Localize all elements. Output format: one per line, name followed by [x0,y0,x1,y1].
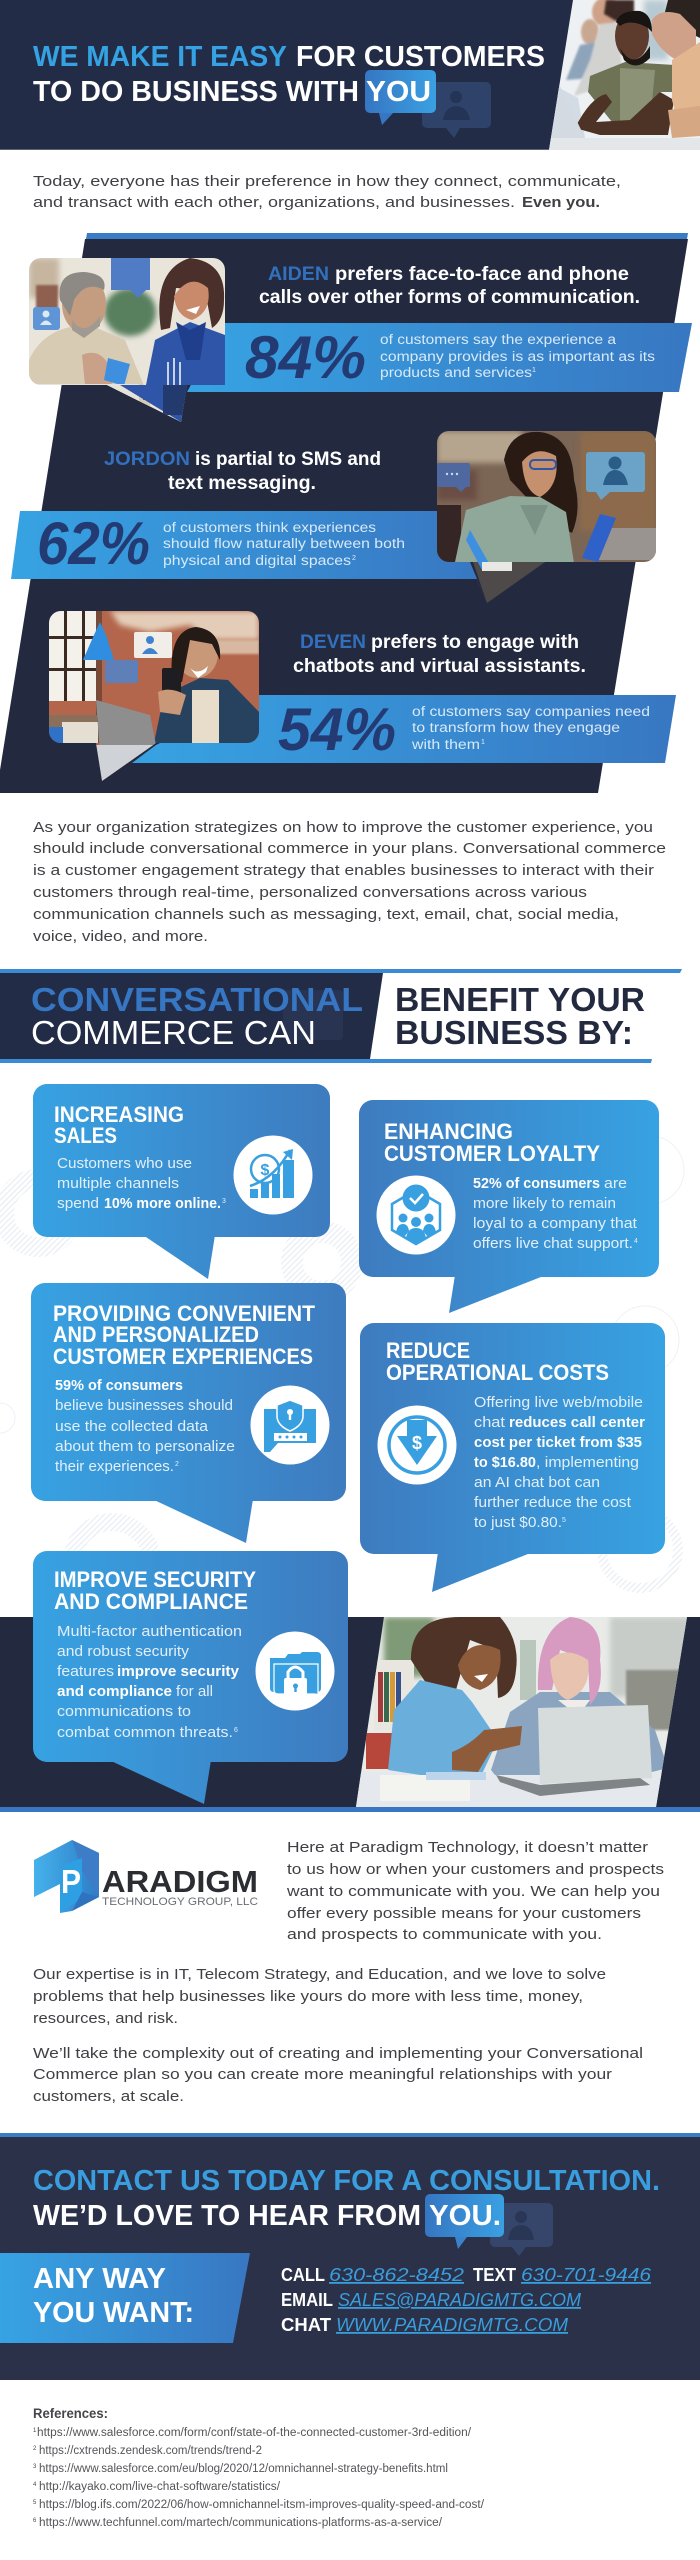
title [33,41,545,108]
text: about Paradigm: Commerce plan so you can create more meaningful relationships with your [33,2066,612,2083]
contact heading [33,2165,660,2232]
logo: Paradigm Technology Group: ARADIGM [102,1864,258,1899]
heading: Aiden [259,264,640,308]
callout: operational costs: further reduce the cost [474,1495,631,1511]
paragraph: conversational commerce: As your organization strategizes on how to improve the customer experience, you [33,819,653,836]
callout: increasing sales [33,1084,330,1279]
callout: security and compliance: combat common threats. [57,1725,233,1741]
photo: women at laptop [350,1617,690,1808]
stat strip 62%: 2 [352,555,356,562]
callout: increasing sales: 10% more online. [104,1196,221,1212]
callout: operational costs: reduces call center [509,1415,645,1431]
photo: Deven [49,611,259,786]
callout: increasing sales: 3 [222,1198,226,1205]
photo: Aiden [29,258,229,430]
callout: increasing sales: Customers who use [57,1156,192,1172]
callout: personalized experiences: AND PERSONALIZED [53,1322,259,1347]
paragraph: conversational commerce: communication channels such as messaging, text, email, chat, social media, [33,906,619,923]
callout: increasing sales: INCREASING [54,1102,184,1127]
text: about Paradigm [33,1839,664,2105]
callout: personalized experiences: 59% of consumers [55,1378,183,1394]
icon: logo cube [34,1840,99,1913]
callout: personalized experiences: 2 [175,1461,179,1468]
callout: customer loyalty [359,1100,659,1313]
references: http://kayako.com/live-chat-software/statistics/ [39,2481,281,2493]
heading: Jordon [104,449,381,494]
stat strip 54%: to transform how they engage [412,720,620,735]
any way you want strip: YOU WANT: [33,2297,194,2329]
callout: security and compliance: Multi-factor authentication [57,1624,242,1640]
callout: personalized experiences: use the collected data [55,1419,209,1435]
references: References: [33,2406,108,2421]
callout: customer loyalty: 52% of consumers [473,1176,600,1192]
text: about Paradigm: We’ll take the complexity out of creating and implementing your Conversational [33,2045,643,2062]
stat strip 62%: physical and digital spaces [163,553,351,568]
logo: Paradigm Technology Group: TECHNOLOGY GROUP, LLC [102,1896,258,1908]
callout: security and compliance: and compliance [57,1684,172,1700]
heading: Deven: chatbots and virtual assistants. [293,656,586,677]
references: https://www.salesforce.com/eu/blog/2020/12/omnichannel-strategy-benefits.html [39,2463,448,2475]
references: https://blog.ifs.com/2022/06/how-omnichannel-itsm-improves-quality-speed-and-cost/ [39,2499,485,2511]
stat strip 54%: of customers say companies need [412,704,650,719]
callout: customer loyalty: offers live chat support. [473,1236,633,1252]
logo: Paradigm Technology Group: P [61,1863,81,1900]
text: about Paradigm: offer every possible means for your customers [287,1905,641,1922]
contact details [281,2265,652,2335]
title: WE MAKE IT EASY [33,41,287,73]
stat strip 84%: products and services [380,365,532,380]
stat strip 62% [11,510,482,579]
persona: Deven [49,611,676,786]
callout: customer loyalty: are [604,1176,627,1192]
ghost speech bubble with person icon [422,82,491,138]
dark band behind security callout [0,1617,700,1812]
callout: customer loyalty: ENHANCING [384,1119,513,1144]
callout: operational costs: OPERATIONAL COSTS [386,1360,609,1385]
stat strip 62%: should flow naturally between both [163,536,405,551]
callout: operational costs: Offering live web/mobile [474,1395,643,1411]
contact details: 630-862-8452 [329,2265,464,2285]
stat strip 84%: 84% [245,324,366,391]
section heading band: BENEFIT YOUR [395,981,645,1018]
stat strip 54% [132,695,676,763]
callout: security and compliance: IMPROVE SECURITY [54,1567,256,1592]
section heading band: CONVERSATIONAL [31,981,363,1018]
ghost speech bubble with person icon [490,2203,553,2256]
paragraph: conversational commerce [33,819,666,945]
callout: security and compliance: for all [176,1684,213,1700]
stat strip 54%: with them [411,737,480,752]
persona: Aiden [29,258,692,430]
any way you want strip [0,2253,250,2343]
callout: personalized experiences [31,1283,346,1543]
persona: Jordon [11,431,657,612]
stat strip 84%: company provides is as important as its [380,349,655,364]
callout: customer loyalty: 4 [634,1238,638,1245]
callout: personalized experiences: their experiences. [55,1459,174,1475]
callout: personalized experiences: believe businesses should [55,1398,233,1414]
logo: Paradigm Technology Group [34,1840,258,1913]
text: about Paradigm: and prospects to communicate with you. [287,1926,602,1943]
callout: increasing sales: SALES [54,1123,117,1148]
paragraph: conversational commerce: voice, video, and more. [33,928,208,945]
callout: operational costs [360,1323,665,1592]
callout: increasing sales: multiple channels [57,1176,179,1192]
contact details: CALL [281,2265,325,2285]
text: about Paradigm: want to communicate with you. We can help you [286,1883,660,1900]
YOU speech bubble [365,70,436,125]
text: about Paradigm: problems that help businesses like yours do more with less time, money, [33,1988,583,2005]
stat strip 84%: of customers say the experience a [380,332,617,347]
heading: Jordon: is partial to SMS and [195,449,381,470]
heading: Deven: prefers to engage with [371,632,579,653]
callout: security and compliance: AND COMPLIANCE [54,1589,248,1614]
section heading band: BUSINESS BY: [395,1014,633,1051]
text: about Paradigm: Our expertise is in IT, Telecom Strategy, and Education, and we love to solve [33,1966,606,1983]
icon: locked folders [256,1632,334,1710]
intro text [33,173,621,211]
section heading band [0,969,682,1063]
icon: loyal customers badge [376,1176,456,1254]
callout: security and compliance [33,1551,348,1804]
title: TO DO BUSINESS WITH [33,76,359,108]
references: 4 [33,2482,37,2488]
callout: operational costs: 5 [562,1517,566,1524]
stat strip 62%: of customers think experiences [163,520,376,535]
title: YOU [366,76,431,108]
references: https://cxtrends.zendesk.com/trends/trend-2 [39,2445,262,2457]
callout: personalized experiences: CUSTOMER EXPERIENCES [53,1344,313,1369]
paragraph: conversational commerce: should include conversational commerce in your plans. Conversational commerce [33,840,666,857]
contact details: TEXT [473,2265,516,2285]
callout: operational costs: an AI chat bot can [474,1475,600,1491]
icon: dollar down arrow [378,1406,456,1484]
callout: customer loyalty: CUSTOMER LOYALTY [384,1141,600,1166]
intro text: and transact with each other, organizations, and businesses. [33,194,515,211]
stat strip 54%: 54% [278,696,396,763]
decorative hatch arcs background [0,1136,684,1602]
text: about Paradigm: customers, at scale. [33,2088,184,2105]
callout: increasing sales: spend [57,1196,99,1212]
paragraph: conversational commerce: is a customer engagement strategy that enables businesses to interact with their [33,862,654,879]
any way you want strip: ANY WAY [33,2263,166,2295]
heading: Aiden: calls over other forms of communication. [259,287,640,308]
heading: Jordon: JORDON [104,449,190,470]
icon: rising coin chart: $ [261,1162,270,1179]
section heading band: COMMERCE CAN [31,1014,316,1051]
icon: dollar down arrow: $ [412,1433,422,1453]
callout: security and compliance: and robust security [57,1644,190,1660]
heading: Aiden: AIDEN [268,264,329,285]
callout: customer loyalty: loyal to a company that [473,1216,637,1232]
references [33,2406,485,2529]
heading: Jordon: text messaging. [168,473,316,494]
YOU speech bubble [425,2194,504,2249]
callout: security and compliance: communications to [57,1704,191,1720]
paragraph: conversational commerce: customers through real-time, personalized conversations across various [33,884,587,901]
heading: Aiden: prefers face-to-face and phone [335,264,629,285]
text: about Paradigm: to us how or when your customers and prospects [287,1861,664,1878]
intro text: Even you. [522,194,600,211]
stat strip 84% [187,323,692,392]
stat strip 54%: 1 [481,739,485,746]
heading: Deven: DEVEN [300,632,366,653]
references: 1 [33,2428,37,2434]
callout: operational costs: cost per ticket from $35 [474,1435,642,1451]
contact heading: CONTACT US TODAY FOR A CONSULTATION. [33,2165,660,2197]
references: 3 [33,2464,37,2470]
contact details: CHAT [281,2315,331,2335]
callout: personalized experiences: about them to personalize [55,1439,235,1455]
callout: security and compliance: 6 [234,1727,238,1734]
header banner [0,0,700,150]
photo: Jordon [437,431,657,612]
callout: personalized experiences: PROVIDING CONVENIENT [53,1301,316,1326]
callout: security and compliance: improve security [117,1664,239,1680]
text: about Paradigm: Here at Paradigm Technology, it doesn’t matter [287,1839,648,1856]
references: https://www.techfunnel.com/martech/communications-platforms-as-a-service/ [39,2517,443,2529]
callout: operational costs: to just $0.80. [474,1515,562,1531]
callout: customer loyalty: more likely to remain [473,1196,616,1212]
heading: Deven [293,632,586,677]
callout: operational costs: chat [474,1415,505,1431]
callout: operational costs: to $16.80 [474,1455,536,1471]
references: https://www.salesforce.com/form/conf/state-of-the-connected-customer-3rd-edition/ [37,2427,472,2439]
references: 5 [33,2500,37,2506]
icon: rising coin chart [234,1136,312,1214]
photo: colleagues at laptop [540,0,700,150]
contact details: EMAIL [281,2290,333,2310]
references: 6 [33,2518,37,2524]
icon: security chat bubble [250,1386,330,1464]
intro text: Today, everyone has their preference in how they connect, communicate, [33,173,621,190]
stat strip 84%: 1 [532,367,536,374]
stat strip 62%: 62% [37,510,150,577]
callout: security and compliance: features [57,1664,114,1680]
contact details: WWW.PARADIGMTG.COM [336,2315,568,2335]
callout: operational costs: , implementing [536,1455,639,1471]
text: about Paradigm: resources, and risk. [33,2010,178,2027]
title: FOR CUSTOMERS [296,41,545,73]
contact heading: WE’D LOVE TO HEAR FROM [33,2200,421,2232]
contact details: SALES@PARADIGMTG.COM [338,2290,581,2310]
contact footer [0,2133,700,2380]
contact details: 630-701-9446 [521,2265,652,2285]
contact heading: YOU. [429,2200,501,2232]
callout: operational costs: REDUCE [386,1338,470,1363]
references: 2 [33,2446,37,2452]
panel: customer personas [0,233,692,793]
